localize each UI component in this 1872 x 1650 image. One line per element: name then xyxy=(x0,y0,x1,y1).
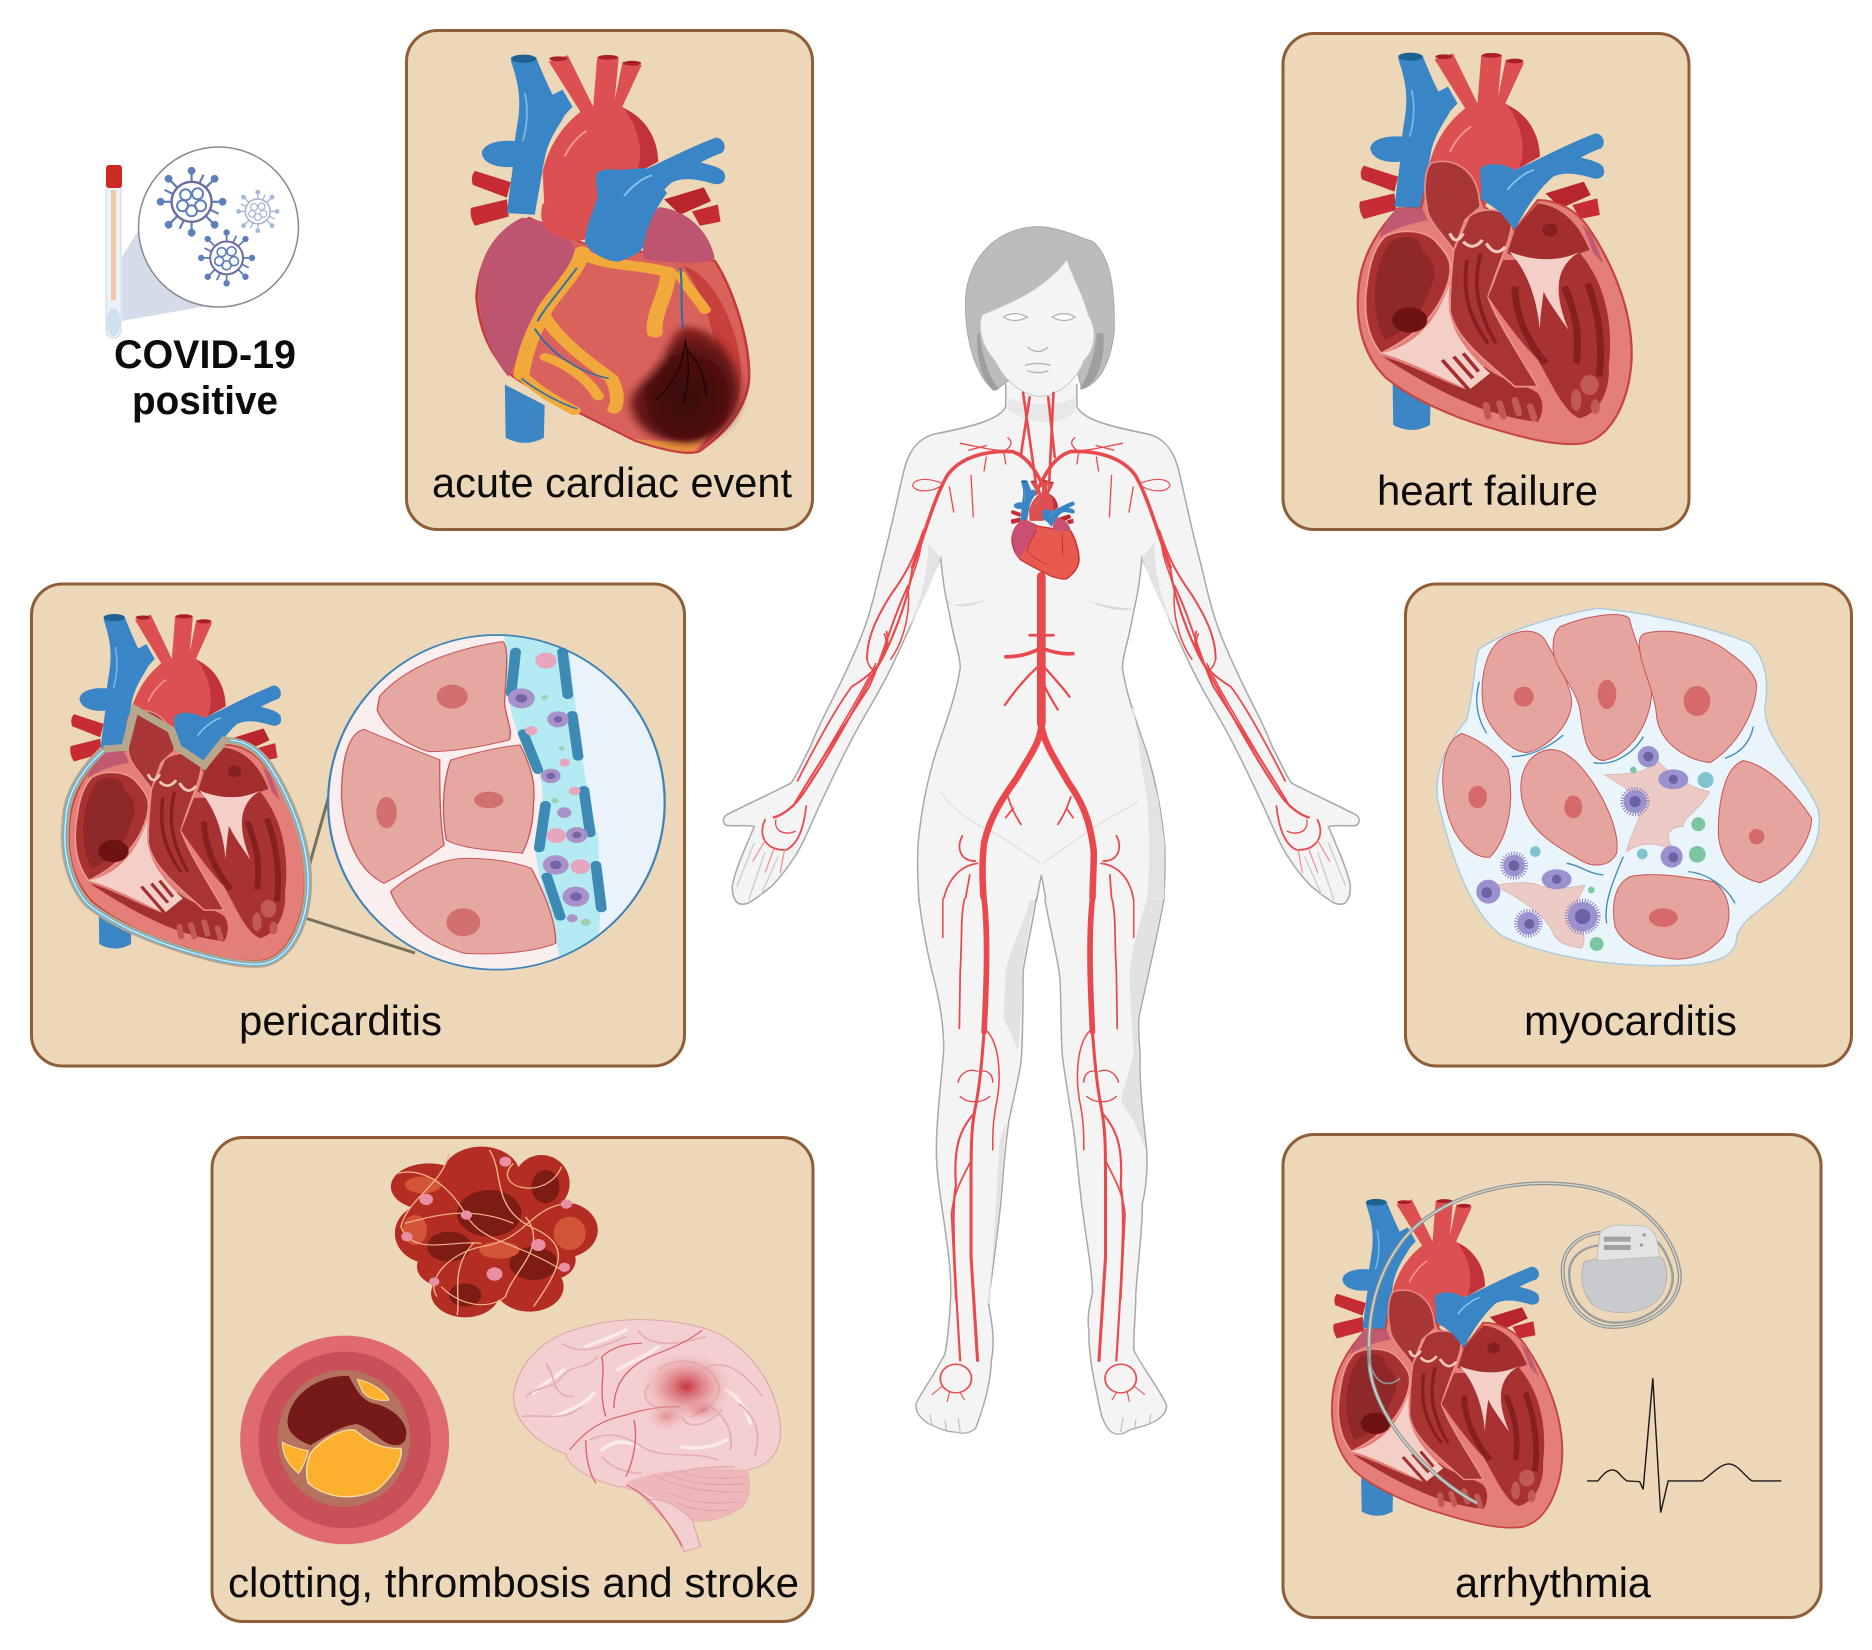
ECG trace xyxy=(1587,1378,1781,1513)
icon: lens cone xyxy=(122,229,212,321)
body silhouette upper xyxy=(723,227,1359,904)
panel: arrhythmia xyxy=(1283,1134,1821,1618)
panel: heart failure xyxy=(1283,34,1689,530)
illustration: heart cross-section xyxy=(1332,1199,1562,1528)
arteries: arms xyxy=(753,438,1330,873)
label: heart failure: heart failure xyxy=(1377,467,1598,514)
illustration: occluded artery cross-section xyxy=(240,1336,449,1544)
label: arrhythmia: arrhythmia xyxy=(1455,1559,1652,1606)
body silhouette legs xyxy=(916,899,1167,1434)
icon: blood sample tube xyxy=(106,165,122,338)
label: myocarditis: myocarditis xyxy=(1524,997,1737,1044)
panel: COVID-19 positive xyxy=(106,147,298,423)
illustration: blood clot xyxy=(391,1147,598,1317)
label: COVID-19 positive: COVID-19 xyxy=(114,333,296,377)
illustration: heart with infarct xyxy=(471,55,749,453)
icon: heart in chest xyxy=(1011,480,1079,579)
icon: magnified circle of virus particles xyxy=(138,147,298,307)
illustration: inflamed myocardial cells xyxy=(1437,608,1819,966)
pacemaker leads xyxy=(1368,1183,1680,1503)
connector lines to magnified view xyxy=(302,785,415,953)
panel: COVID-19 positive: positive xyxy=(132,379,278,423)
illustration: magnified pericardial tissue xyxy=(327,634,666,970)
label: pericarditis: pericarditis xyxy=(239,997,442,1044)
label: clotting, thrombosis and stroke: clotting, thrombosis and stroke xyxy=(228,1559,799,1606)
illustration: heart with inflamed pericardium xyxy=(65,614,308,964)
panel: acute cardiac event xyxy=(406,30,812,530)
human body with arterial system xyxy=(723,227,1359,1434)
illustration: brain with stroke lesion xyxy=(513,1320,781,1552)
pacemaker device xyxy=(1582,1225,1667,1313)
arteries: torso xyxy=(943,393,1134,904)
panel: myocarditis xyxy=(1406,584,1852,1066)
panel: pericarditis xyxy=(32,584,714,1066)
label: acute cardiac event: acute cardiac event xyxy=(432,459,792,506)
panel: clotting, thrombosis and stroke xyxy=(212,1138,813,1622)
face and hair xyxy=(965,227,1114,396)
arteries: legs xyxy=(932,899,1145,1402)
illustration: heart cross-section xyxy=(1358,53,1632,444)
